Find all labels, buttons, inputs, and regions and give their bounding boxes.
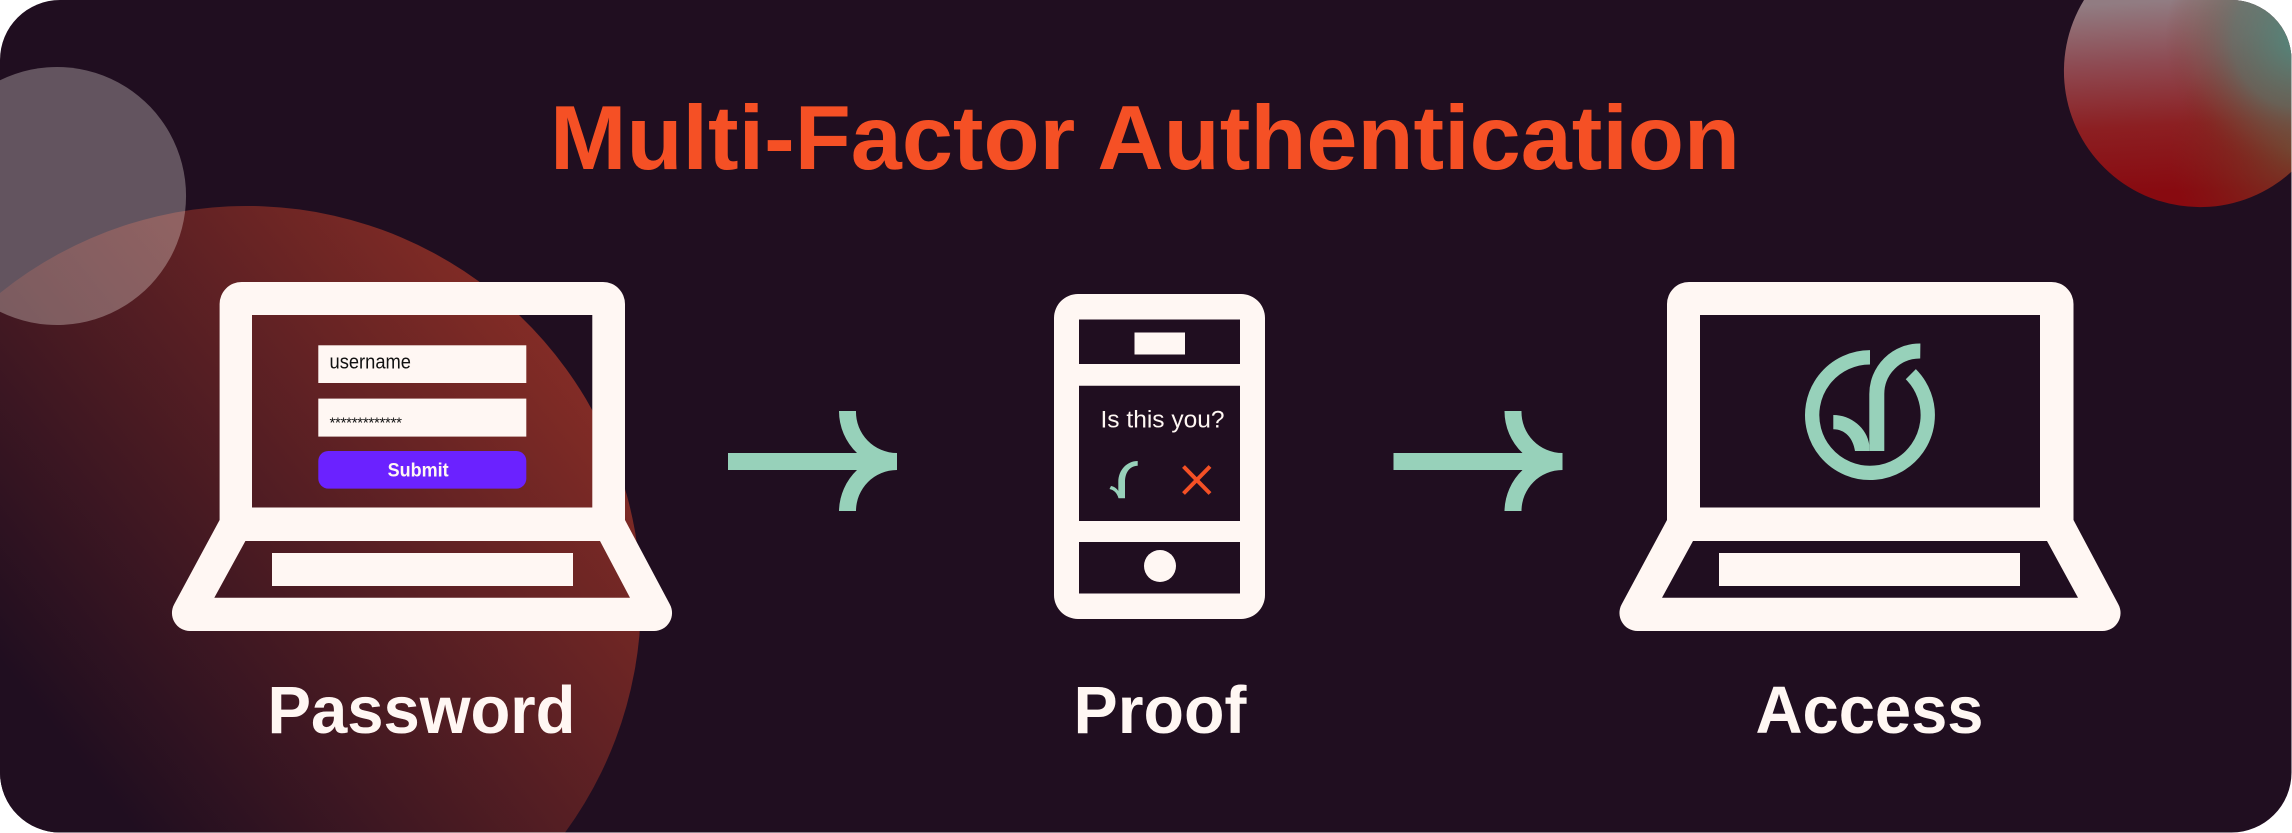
- decorative large red gradient circle: [0, 206, 641, 833]
- decorative translucent circle top left: [0, 67, 186, 325]
- label: Proof: Proof: [1074, 673, 1247, 748]
- icon: logo: [1812, 351, 1928, 473]
- decorative gradient circle top right: [2064, 0, 2292, 207]
- submit button: Submit: [388, 460, 449, 482]
- submit button: [318, 451, 526, 489]
- prompt text: Is this you?: [1100, 407, 1224, 434]
- label: Password: Password: [268, 673, 576, 748]
- phone home button: [1144, 550, 1176, 582]
- password field: [318, 399, 526, 437]
- label: Access: Access: [1756, 673, 1984, 748]
- title: Multi-Factor Authentication: [550, 88, 1740, 189]
- icon: laptop with logo: [1619, 282, 2121, 631]
- username field: username: [330, 352, 411, 374]
- phone speaker: [1134, 332, 1185, 354]
- arrow: password to proof: [728, 411, 897, 511]
- icon: laptop with login form: [172, 282, 672, 631]
- icon: check mark: [1110, 461, 1138, 498]
- password field: *************: [330, 414, 402, 432]
- icon: cross: [1184, 466, 1210, 494]
- arrow: proof to access: [1394, 411, 1562, 511]
- icon: phone with prompt: [1054, 294, 1265, 619]
- username field: [318, 345, 526, 383]
